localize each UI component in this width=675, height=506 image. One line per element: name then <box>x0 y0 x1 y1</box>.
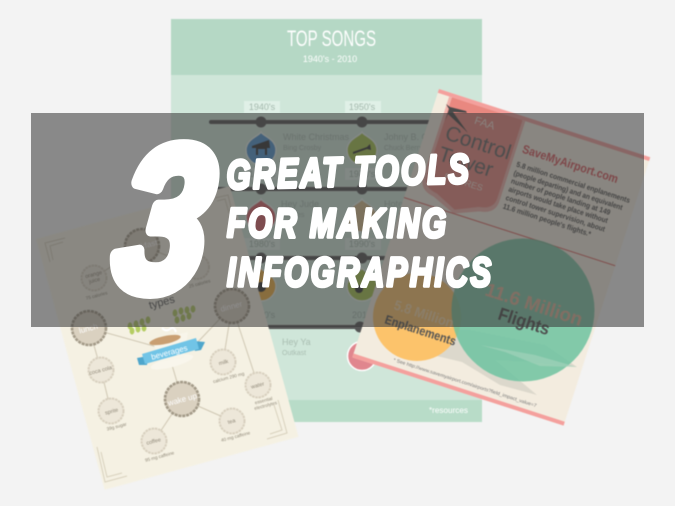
node: lunch: lunch <box>78 322 99 335</box>
timeline row 3: 1980's <box>249 239 276 249</box>
timeline row 4: 2010 <box>352 310 372 320</box>
timeline row 1: 1940's <box>249 102 276 112</box>
timeline row 1: Bing Crosby <box>283 145 322 152</box>
node: dinner <box>215 289 249 323</box>
airplane shadow <box>392 330 577 395</box>
resources link: *resources <box>429 406 468 415</box>
FAA label: FAA <box>473 115 497 133</box>
node: milk: calcium 290 mg <box>212 371 245 384</box>
figures label: FIGURES <box>443 171 484 193</box>
node: sprite <box>98 398 128 432</box>
heading: top songs: TOP SONGS <box>287 26 376 51</box>
node: breakfast: breakfast <box>124 238 159 255</box>
title line 1: GREAT TOOLS <box>226 145 469 198</box>
description paragraph: airports would take place without <box>507 184 610 225</box>
title numeral: 3 <box>105 104 225 334</box>
subheading: year range: 1940's - 2010 <box>303 54 357 64</box>
node: water <box>246 372 278 411</box>
node: coffee <box>142 428 175 463</box>
node: wake up <box>165 382 199 416</box>
timeline row 1: Johny B. Goode <box>384 132 449 142</box>
node: coffee: 95 mg caffeine <box>144 450 175 463</box>
node: wake up: wake up <box>166 391 198 408</box>
label: 5.8 million: 5.8 Million <box>392 297 456 331</box>
timeline row 2: 1970's <box>349 169 376 179</box>
timeline row 4: Outkast <box>282 350 306 357</box>
description paragraph: control tower supervision, about <box>505 193 607 234</box>
timeline row 1: Chuck Berry <box>384 145 423 152</box>
node: water: water <box>250 381 265 391</box>
node: right of breakfast: 25 calories <box>188 278 212 289</box>
node: orange juice <box>82 266 109 301</box>
timeline row 2 <box>209 168 446 232</box>
node: breakfast <box>124 229 159 263</box>
node: dinner: dinner <box>219 299 244 314</box>
node: orange juice: 75 calories <box>85 290 109 301</box>
node: milk: milk <box>218 359 229 367</box>
description paragraph <box>502 160 631 247</box>
panel: food and beverages infographic <box>36 186 298 490</box>
timeline row 3: 1990's <box>349 239 376 249</box>
label: enplanements: Enplanements <box>383 313 458 349</box>
dark overlay band <box>31 113 644 327</box>
timeline row 4 <box>209 310 434 370</box>
icon: left leaves <box>128 316 150 335</box>
timeline row 4: Hey Ya <box>282 337 311 347</box>
timeline row 1: White Christmas <box>283 132 350 142</box>
node: milk <box>210 350 245 384</box>
node: right of breakfast <box>185 255 212 289</box>
node: coca cola <box>88 358 114 382</box>
node: coffee: coffee <box>146 437 162 447</box>
icon: coffee cup <box>149 328 195 373</box>
badge title: Control <box>442 122 514 164</box>
node: tea: 40 mg caffeine <box>220 430 251 443</box>
node: coca cola: coca cola <box>89 365 114 377</box>
circle: enplanements <box>373 273 461 361</box>
panel: top songs infographic <box>171 19 482 422</box>
icon: right leaves <box>173 305 195 324</box>
timeline row 1 <box>209 101 449 165</box>
description paragraph: (people departing) and an equivalent <box>513 168 624 212</box>
panel: control tower infographic <box>352 89 650 426</box>
node: water: essential <box>254 396 273 405</box>
red shield badge <box>415 96 525 226</box>
description paragraph: 11.6 million people's flights.* <box>502 202 592 238</box>
node: sprite: 39g sugar <box>106 421 128 432</box>
site name: SaveMyAirport.com <box>521 142 620 186</box>
banner: beverages <box>137 338 205 365</box>
node: tea: tea <box>227 418 237 426</box>
description paragraph: 5.8 million commercial enplanements <box>515 160 631 205</box>
airplane on circles <box>480 345 577 367</box>
description paragraph: number of people landing at 149 <box>510 176 612 217</box>
timeline row 2: Hey Jude <box>281 199 319 209</box>
banner: beverages: beverages <box>150 343 189 362</box>
title line 2: FOR MAKING <box>227 200 446 246</box>
timeline row 2: 1960's <box>249 169 276 179</box>
node: water: electrolytes <box>254 400 278 411</box>
types label: types <box>148 293 177 312</box>
node: orange juice: juice <box>88 277 101 286</box>
timeline row 3 <box>209 238 434 301</box>
timeline row 2: Hotel California <box>384 199 446 209</box>
node: lunch <box>72 311 106 345</box>
circle: flights <box>452 238 594 382</box>
connector lines <box>89 246 258 441</box>
timeline row 1: 1950's <box>349 102 376 112</box>
label: flights: Flights <box>496 304 552 339</box>
red shield inner <box>419 97 522 221</box>
title line 3: INFOGRAPHICS <box>227 249 491 295</box>
icon: airplane <box>445 104 468 133</box>
node: orange juice: orange <box>85 270 103 280</box>
corner ornaments <box>45 195 287 482</box>
node: sprite: sprite <box>104 407 119 417</box>
timeline row 4: 2000's <box>249 310 276 320</box>
node: tea <box>220 408 251 443</box>
timeline row 2: Beatles <box>281 212 305 219</box>
label: 11.6 million: 11.6 Million <box>482 280 585 331</box>
footnote: * See http://www.savemyairport.com/airports?field_impact_value=7 <box>393 357 537 409</box>
badge title line 2: Tower <box>436 143 496 182</box>
